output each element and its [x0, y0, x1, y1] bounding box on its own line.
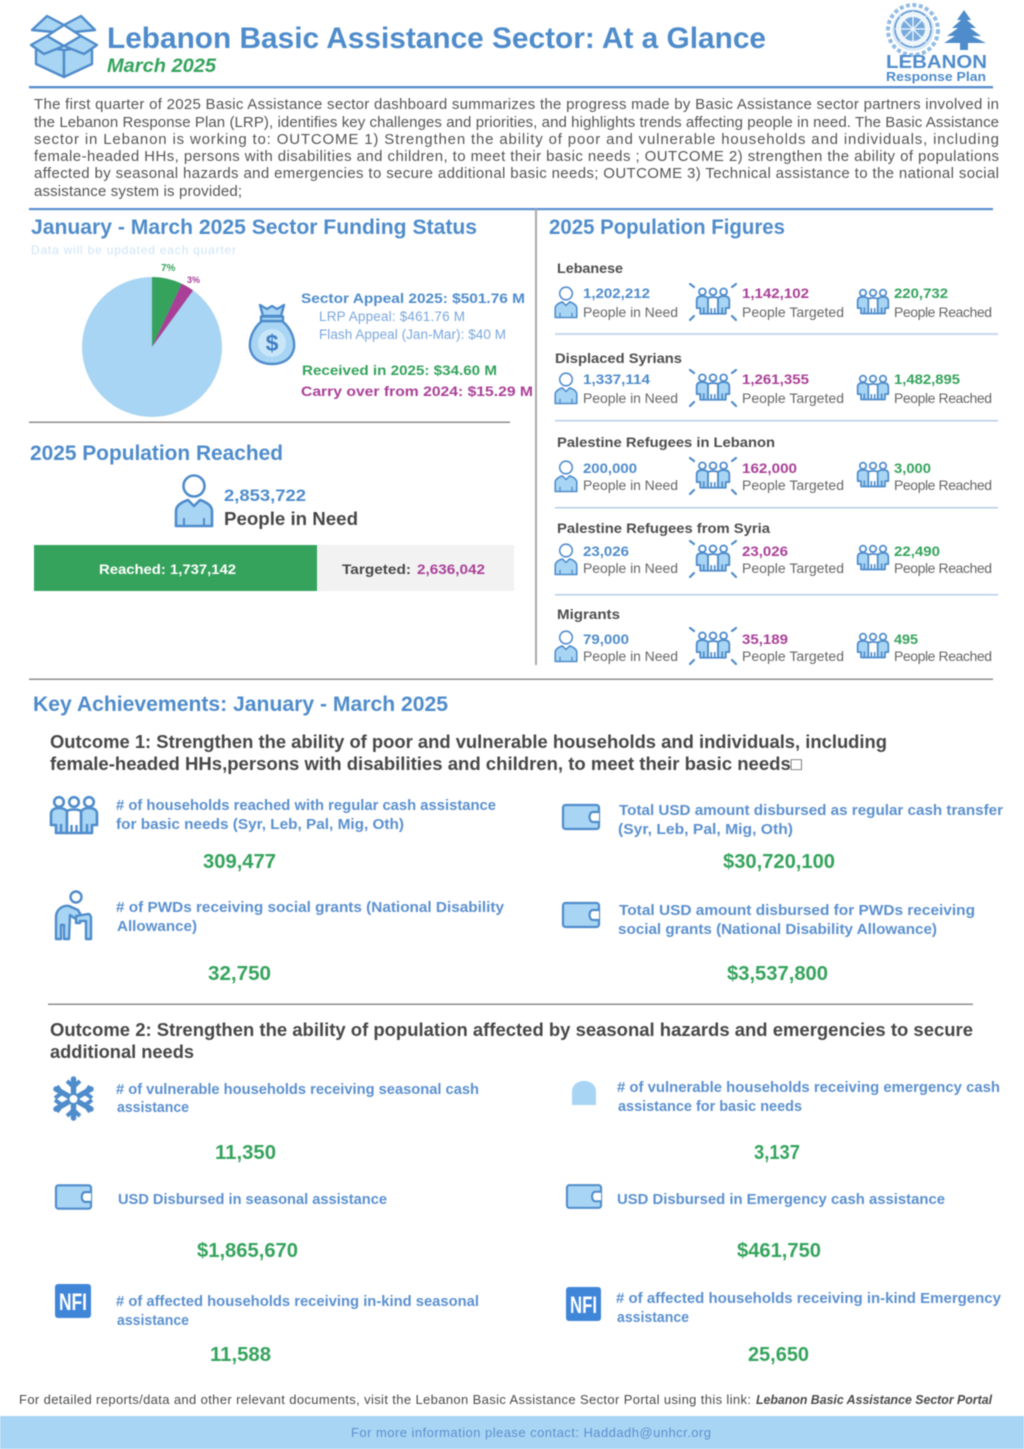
funding figures: Sector Appeal 2025: $501.76 M — [301, 290, 525, 306]
heading: outcome 1: female-headed HHs,persons with disabilities and children, to meet their basic needs□ — [50, 754, 802, 774]
footer note: Lebanon Basic Assistance Sector Portal — [756, 1392, 992, 1407]
logo: Lebanon Response Plan: Response Plan — [886, 69, 986, 84]
indicator: USD PWD grants: social grants (National Disability Allowance) — [618, 922, 937, 938]
pie chart: funding: 7% — [161, 263, 176, 274]
indicator: in-kind emergency: # of affected households receiving in-kind Emergency — [616, 1291, 1001, 1307]
icon: emergency placeholder — [572, 1081, 596, 1105]
heading: population figures: 2025 Population Figures — [549, 216, 785, 239]
icon: money bag — [250, 305, 294, 364]
logo: Lebanon Response Plan: LEBANON — [886, 52, 987, 72]
row: Displaced Syrians: People Reached — [894, 390, 992, 406]
funding figures: Flash Appeal (Jan-Mar): $40 M — [319, 327, 506, 342]
row: Displaced Syrians: 1,261,355 — [742, 371, 809, 387]
row: Displaced Syrians: 1,337,114 — [583, 371, 650, 387]
row: Migrants — [555, 606, 992, 664]
indicator: emergency cash households: 3,137 — [754, 1142, 800, 1164]
row: Displaced Syrians — [555, 350, 992, 406]
intro paragraph — [34, 96, 999, 200]
row: Lebanese: People Targeted — [742, 304, 844, 320]
row: Palestine Refugees from Syria: Palestine Refugees from Syria — [557, 520, 770, 536]
row: Displaced Syrians: People in Need — [583, 390, 678, 406]
row: Displaced Syrians: People Targeted — [742, 390, 844, 406]
row: Palestine Refugees in Lebanon: Palestine Refugees in Lebanon — [557, 434, 775, 450]
intro paragraph: affected by seasonal hazards and emergencies to secure additional basic needs; OUTCOME 3) Technical assistance to the national social — [34, 165, 999, 182]
icon: open box — [31, 16, 97, 77]
indicator: in-kind emergency: assistance — [617, 1310, 689, 1326]
row: Palestine Refugees in Lebanon: 3,000 — [894, 460, 931, 476]
indicator: in-kind seasonal: NFI — [59, 1289, 87, 1316]
panel: outcome 2 — [50, 1020, 1001, 1366]
indicator: seasonal cash households: # of vulnerable households receiving seasonal cash — [116, 1082, 479, 1098]
indicator: in-kind seasonal — [55, 1284, 479, 1366]
row: Lebanese: 1,142,102 — [742, 285, 809, 301]
progress bar: reached vs targeted: Targeted: — [342, 561, 411, 577]
pie chart: funding: 3% — [187, 275, 200, 285]
row: Palestine Refugees in Lebanon: 162,000 — [742, 460, 797, 476]
indicator: USD PWD grants: Total USD amount disbursed for PWDs receiving — [619, 903, 975, 919]
indicator: USD regular cash: (Syr, Leb, Pal, Mig, Oth) — [618, 822, 793, 838]
intro paragraph: sector in Lebanon is working to: OUTCOME 1) Strengthen the ability of poor and vulnerable households and individuals, including — [34, 131, 999, 148]
indicator: USD regular cash: $30,720,100 — [723, 851, 835, 873]
row: Palestine Refugees from Syria: People Reached — [894, 560, 992, 576]
indicator: seasonal cash households: 11,350 — [215, 1142, 276, 1164]
pie chart: funding — [82, 263, 222, 417]
people in need figure: 2,853,722 — [224, 486, 306, 505]
indicator: in-kind seasonal: # of affected households receiving in-kind seasonal — [116, 1294, 479, 1310]
row: Palestine Refugees in Lebanon: People Reached — [894, 477, 992, 493]
progress bar: reached vs targeted: Reached: 1,737,142 — [99, 561, 236, 577]
row: Palestine Refugees in Lebanon — [555, 434, 992, 494]
row: Palestine Refugees from Syria: People Targeted — [742, 560, 844, 576]
row: Lebanese: 1,202,212 — [583, 285, 650, 301]
indicator: emergency cash households — [572, 1080, 1000, 1164]
indicator: households regular cash: 309,477 — [203, 851, 276, 873]
row: Lebanese: People in Need — [583, 304, 678, 320]
row: Palestine Refugees from Syria: 23,026 — [583, 543, 629, 559]
icon: snowflake — [55, 1079, 92, 1118]
row: Migrants: Migrants — [557, 606, 620, 622]
row: Displaced Syrians: Displaced Syrians — [555, 350, 682, 366]
indicator: PWD social grants: 32,750 — [208, 963, 271, 985]
heading: outcome 2 — [50, 1020, 973, 1062]
indicator: households regular cash: for basic needs (Syr, Leb, Pal, Mig, Oth) — [116, 817, 404, 833]
indicator: USD emergency — [567, 1185, 945, 1262]
icon: money bag: $ — [266, 330, 279, 356]
funding figures: Carry over from 2024: $15.29 M — [301, 383, 533, 399]
contact bar: For more information please contact: Haddadh@unhcr.org — [351, 1425, 711, 1440]
funding figures — [301, 290, 533, 399]
panel: population reached — [30, 442, 514, 591]
panel: population figures — [549, 216, 998, 664]
indicator: PWD social grants — [56, 892, 504, 985]
heading: key achievements: Key Achievements: January - March 2025 — [33, 693, 448, 716]
row: Migrants: People in Need — [583, 648, 678, 664]
row: Palestine Refugees in Lebanon: People in Need — [583, 477, 678, 493]
row: Migrants: 79,000 — [583, 631, 629, 647]
row: Displaced Syrians: 1,482,895 — [894, 371, 960, 387]
indicator: in-kind emergency — [566, 1287, 1001, 1366]
panel: funding status — [31, 216, 533, 417]
indicator: USD emergency: $461,750 — [737, 1240, 821, 1262]
intro paragraph: The first quarter of 2025 Basic Assistance sector dashboard summarizes the progress made by Basic Assistance sector partners involved in — [34, 96, 999, 113]
indicator: in-kind emergency: 25,650 — [748, 1344, 809, 1366]
note: update frequency: Data will be updated each quarter — [31, 243, 236, 257]
intro paragraph: the Lebanon Response Plan (LRP), identifies key challenges and priorities, and highlights trends affecting people in need. The Basic Assistance — [34, 114, 999, 131]
row: Migrants: People Targeted — [742, 648, 844, 664]
indicator: USD regular cash — [563, 803, 1003, 873]
row: Palestine Refugees from Syria: 23,026 — [742, 543, 788, 559]
row: Palestine Refugees from Syria: 22,490 — [894, 543, 940, 559]
subtitle date: March 2025 — [107, 56, 216, 77]
indicator: USD seasonal: $1,865,670 — [197, 1240, 298, 1262]
row: Migrants: People Reached — [894, 648, 992, 664]
icon: person with walker — [56, 892, 91, 939]
indicator: USD regular cash: Total USD amount disbursed as regular cash transfer — [619, 803, 1003, 819]
indicator: seasonal cash households — [55, 1079, 479, 1164]
row: Lebanese: Lebanese — [557, 260, 623, 276]
row: Lebanese — [555, 260, 992, 320]
heading: funding status: January - March 2025 Sector Funding Status — [31, 216, 477, 239]
heading: outcome 2: additional needs — [50, 1042, 194, 1062]
row: Lebanese: 220,732 — [894, 285, 948, 301]
heading: outcome 1 — [50, 732, 887, 774]
indicator: USD emergency: USD Disbursed in Emergency cash assistance — [617, 1192, 945, 1208]
title: Lebanon Basic Assistance Sector: At a Glance — [107, 22, 766, 55]
progress bar: reached vs targeted: 2,636,042 — [417, 561, 485, 577]
indicator: USD PWD grants — [563, 903, 975, 985]
row: Migrants: 35,189 — [742, 631, 788, 647]
contact bar — [0, 1416, 1024, 1449]
intro paragraph: female-headed HHs, persons with disabilities and children, to meet their basic needs ; OUTCOME 2) strengthen the ability of populations — [34, 148, 999, 165]
icon: person — [176, 476, 212, 526]
intro paragraph: assistance system is provided; — [34, 183, 242, 200]
row: Palestine Refugees in Lebanon: People Targeted — [742, 477, 844, 493]
heading: outcome 1: Outcome 1: Strengthen the ability of poor and vulnerable households and individuals, including — [50, 732, 887, 752]
heading: outcome 2: Outcome 2: Strengthen the ability of population affected by seasonal hazards and emergencies to secure — [50, 1020, 973, 1040]
indicator: emergency cash households: assistance for basic needs — [618, 1099, 802, 1115]
indicator: USD PWD grants: $3,537,800 — [727, 963, 828, 985]
funding figures: Received in 2025: $34.60 M — [302, 362, 497, 378]
row: Palestine Refugees from Syria — [555, 520, 992, 577]
indicator: in-kind seasonal: 11,588 — [210, 1344, 271, 1366]
indicator: in-kind emergency: NFI — [570, 1292, 597, 1319]
row: Lebanese: People Reached — [894, 304, 992, 320]
people in need figure: People in Need — [224, 509, 358, 529]
row: Palestine Refugees in Lebanon: 200,000 — [583, 460, 637, 476]
progress bar: reached vs targeted — [34, 545, 514, 591]
indicator: PWD social grants: # of PWDs receiving social grants (National Disability — [116, 900, 504, 916]
footer note: For detailed reports/data and other relevant documents, visit the Lebanon Basic Assistance Sector Portal using this link: — [19, 1392, 751, 1407]
row: Migrants: 495 — [894, 631, 918, 647]
indicator: PWD social grants: Allowance) — [117, 919, 197, 935]
indicator: households regular cash: # of households reached with regular cash assistance — [116, 798, 496, 814]
heading: population reached: 2025 Population Reached — [30, 442, 283, 465]
logo: Lebanon Response Plan — [886, 5, 987, 84]
people in need figure — [224, 486, 358, 529]
indicator: households regular cash — [51, 797, 496, 873]
indicator: emergency cash households: # of vulnerable households receiving emergency cash — [617, 1080, 1000, 1096]
indicator: in-kind seasonal: assistance — [117, 1313, 189, 1329]
indicator: USD seasonal — [56, 1185, 387, 1262]
indicator: USD seasonal: USD Disbursed in seasonal assistance — [118, 1192, 387, 1208]
panel: outcome 1 — [50, 732, 1003, 985]
indicator: seasonal cash households: assistance — [117, 1100, 189, 1116]
row: Palestine Refugees from Syria: People in Need — [583, 560, 678, 576]
funding figures: LRP Appeal: $461.76 M — [319, 309, 465, 324]
